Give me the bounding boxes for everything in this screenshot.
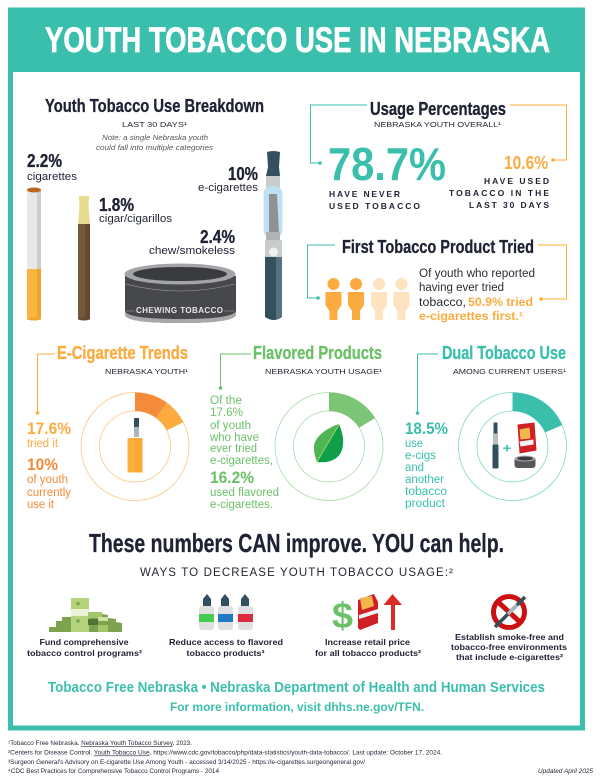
donut chart: flavored products	[275, 392, 383, 500]
stat: e-cigarettes: e-cigarettes	[198, 182, 259, 194]
stat text	[405, 419, 448, 510]
icon: flavor bottles	[199, 594, 253, 630]
panel: dual tobacco use	[405, 343, 567, 510]
note: could fall into multiple categories	[96, 145, 214, 152]
more information line: For more information, visit dhhs.ne.gov/TFN.	[170, 700, 424, 714]
stat text: used flavored	[210, 487, 279, 499]
stat: never used: 78.7%	[328, 138, 446, 190]
icon: e-cig, cigarettes and tin: +	[502, 440, 512, 456]
footnotes: ¹Tobacco Free Nebraska. Nebraska Youth Tobacco Survey , 2023.	[8, 741, 192, 747]
icon: vape device	[128, 418, 142, 472]
panel: first tobacco product tried	[308, 237, 566, 323]
caption: for all tobacco products²	[315, 648, 421, 658]
heading: breakdown: Youth Tobacco Use Breakdown	[45, 96, 264, 116]
heading: usage percentages: Usage Percentages	[370, 99, 506, 119]
stat: used in last 30 days: LAST 30 DAYS	[469, 200, 549, 210]
connector	[416, 354, 438, 415]
action: fund programs	[27, 598, 142, 658]
subheading: AMONG CURRENT USERS¹	[453, 367, 567, 376]
connector: orange	[538, 245, 566, 301]
footnotes	[8, 741, 442, 775]
action: reduce access	[169, 594, 283, 658]
stat text: ever tried	[210, 443, 257, 455]
heading: dual tobacco use: Dual Tobacco Use	[442, 343, 566, 363]
caption: Establish smoke-free and	[455, 632, 564, 642]
connector: teal	[308, 245, 335, 300]
stat text: use it	[27, 499, 55, 511]
caption: Fund comprehensive	[40, 637, 129, 647]
stat text: currently	[27, 487, 71, 499]
heading: first tobacco product: First Tobacco Product Tried	[342, 237, 534, 257]
icon: no e-cigarette	[494, 596, 525, 628]
stat text: use	[405, 438, 423, 450]
icon: cigar	[78, 196, 90, 320]
text: first product: tobacco,	[419, 297, 466, 309]
subheading: NEBRASKA YOUTH USAGE¹	[265, 367, 383, 376]
icon: dollar, pack, arrow: $	[332, 595, 353, 636]
stat text: 18.5%	[405, 419, 448, 438]
stat: used in last 30 days: TOBACCO IN THE	[449, 188, 549, 198]
panel: flavored products	[209, 343, 383, 511]
caption: Increase retail price	[325, 637, 410, 647]
organisation line: Tobacco Free Nebraska • Nebraska Department of Health and Human Services	[48, 680, 545, 696]
stat text	[27, 419, 71, 511]
stat: used in last 30 days	[449, 153, 549, 210]
text: first product: having ever tried	[419, 282, 504, 294]
panel: youth tobacco use breakdown	[27, 96, 282, 323]
panel: usage percentages	[310, 99, 566, 211]
icon: chewing tobacco tin: CHEWING TOBACCO	[136, 306, 223, 315]
stat text: and	[405, 462, 424, 474]
caption: Reduce access to flavored	[169, 637, 283, 647]
stat: e-cigarettes	[198, 164, 259, 194]
caption: tobacco products³	[186, 648, 265, 658]
stat text	[209, 395, 279, 511]
connector: teal	[310, 105, 367, 165]
caption	[315, 637, 421, 658]
action: smoke-free environments	[451, 596, 567, 662]
title banner	[8, 8, 585, 72]
stat: chew: 2.4%	[200, 227, 235, 247]
stat: never used	[328, 138, 446, 211]
stat: never used: HAVE NEVER	[329, 189, 400, 199]
caption: tobacco control programs²	[27, 648, 142, 658]
footnotes: ³Surgeon General's Advisory on E-cigarette Use Among Youth - accessed 3/14/2025 - https://e-cigarettes.surgeongeneral.gov/	[8, 760, 365, 766]
caption	[169, 637, 283, 658]
icon: people	[326, 278, 410, 320]
text: first product: Of youth who reported	[419, 268, 535, 280]
caption	[451, 632, 567, 662]
stat text: 10%	[27, 455, 58, 474]
stat: chew	[149, 227, 236, 257]
heading: e-cigarette trends: E-Cigarette Trends	[57, 343, 188, 363]
text: first product: 50.9% tried	[468, 297, 533, 309]
footnotes: ⁴CDC Best Practices for Comprehensive Tobacco Control Programs - 2014	[8, 768, 220, 775]
icon: chewing tobacco tin	[124, 264, 236, 323]
heading: flavored products: Flavored Products	[253, 343, 382, 363]
connector: orange	[510, 105, 566, 162]
stat text: who have	[209, 432, 259, 444]
text: first product	[419, 268, 535, 323]
icon: leaf	[314, 424, 343, 464]
stat: chew: chew/smokeless	[149, 245, 236, 257]
stat text: another	[405, 474, 444, 486]
donut chart: dual use	[458, 392, 566, 500]
subheading: NEBRASKA YOUTH¹	[105, 367, 189, 376]
connector	[219, 354, 251, 390]
footnotes: ²Centers for Disease Control. Youth Tobacco Use , https://www.cdc.gov/tobacco/php/data-statistics/youth-data-tobacco/. Last update: October 17, 2024.	[8, 750, 442, 756]
stat: e-cigarettes: 10%	[228, 164, 258, 184]
stat text: product	[405, 498, 446, 510]
icon: stacks of money	[49, 598, 122, 632]
stat text: Of the	[210, 395, 242, 407]
subheading: ways to decrease: WAYS TO DECREASE YOUTH TOBACCO USAGE:²	[140, 567, 453, 579]
stat text: 16.2%	[210, 468, 254, 487]
panel: e-cigarette trends	[27, 343, 189, 511]
stat: used in last 30 days: HAVE USED	[484, 176, 549, 186]
updated date: Updated April 2025	[538, 769, 594, 775]
stat text: 17.6%	[210, 407, 243, 419]
action: increase price	[315, 594, 421, 658]
text: first product: e-cigarettes first.¹	[419, 311, 523, 323]
stat text: e-cigs	[405, 450, 436, 462]
subheading: last 30 days: LAST 30 DAYS¹	[122, 120, 188, 129]
stat: used in last 30 days: 10.6%	[504, 153, 548, 173]
stat: cigarettes: 2.2%	[27, 151, 62, 171]
icon: cigarette	[27, 188, 41, 320]
stat text: of youth	[27, 474, 68, 486]
donut chart: e-cigarette trends	[81, 392, 189, 500]
note: Note: a single Nebraska youth	[102, 135, 208, 142]
stat text: 17.6%	[27, 419, 71, 438]
stat text: of youth	[210, 420, 251, 432]
subheading: nebraska youth overall: NEBRASKA YOUTH OVERALL¹	[374, 120, 502, 129]
connector	[36, 354, 55, 415]
stat: cigar: cigar/cigarillos	[99, 213, 173, 225]
caption: tobacco-free environments	[451, 642, 567, 652]
stat: cigarettes	[27, 151, 78, 183]
stat: cigarettes: cigarettes	[27, 171, 78, 183]
caption: that include e-cigarettes²	[456, 652, 563, 662]
note	[96, 135, 214, 152]
caption	[27, 637, 142, 658]
stat text: e-cigarettes,	[210, 455, 273, 467]
stat text: tried it	[27, 438, 59, 450]
stat: never used: USED TOBACCO	[329, 201, 420, 211]
stat: cigar	[99, 195, 173, 225]
stat: cigar: 1.8%	[99, 195, 134, 215]
stat text: tobacco	[405, 486, 447, 498]
icon: e-cigarette	[264, 151, 282, 320]
stat text: e-cigarettes.	[210, 499, 273, 511]
